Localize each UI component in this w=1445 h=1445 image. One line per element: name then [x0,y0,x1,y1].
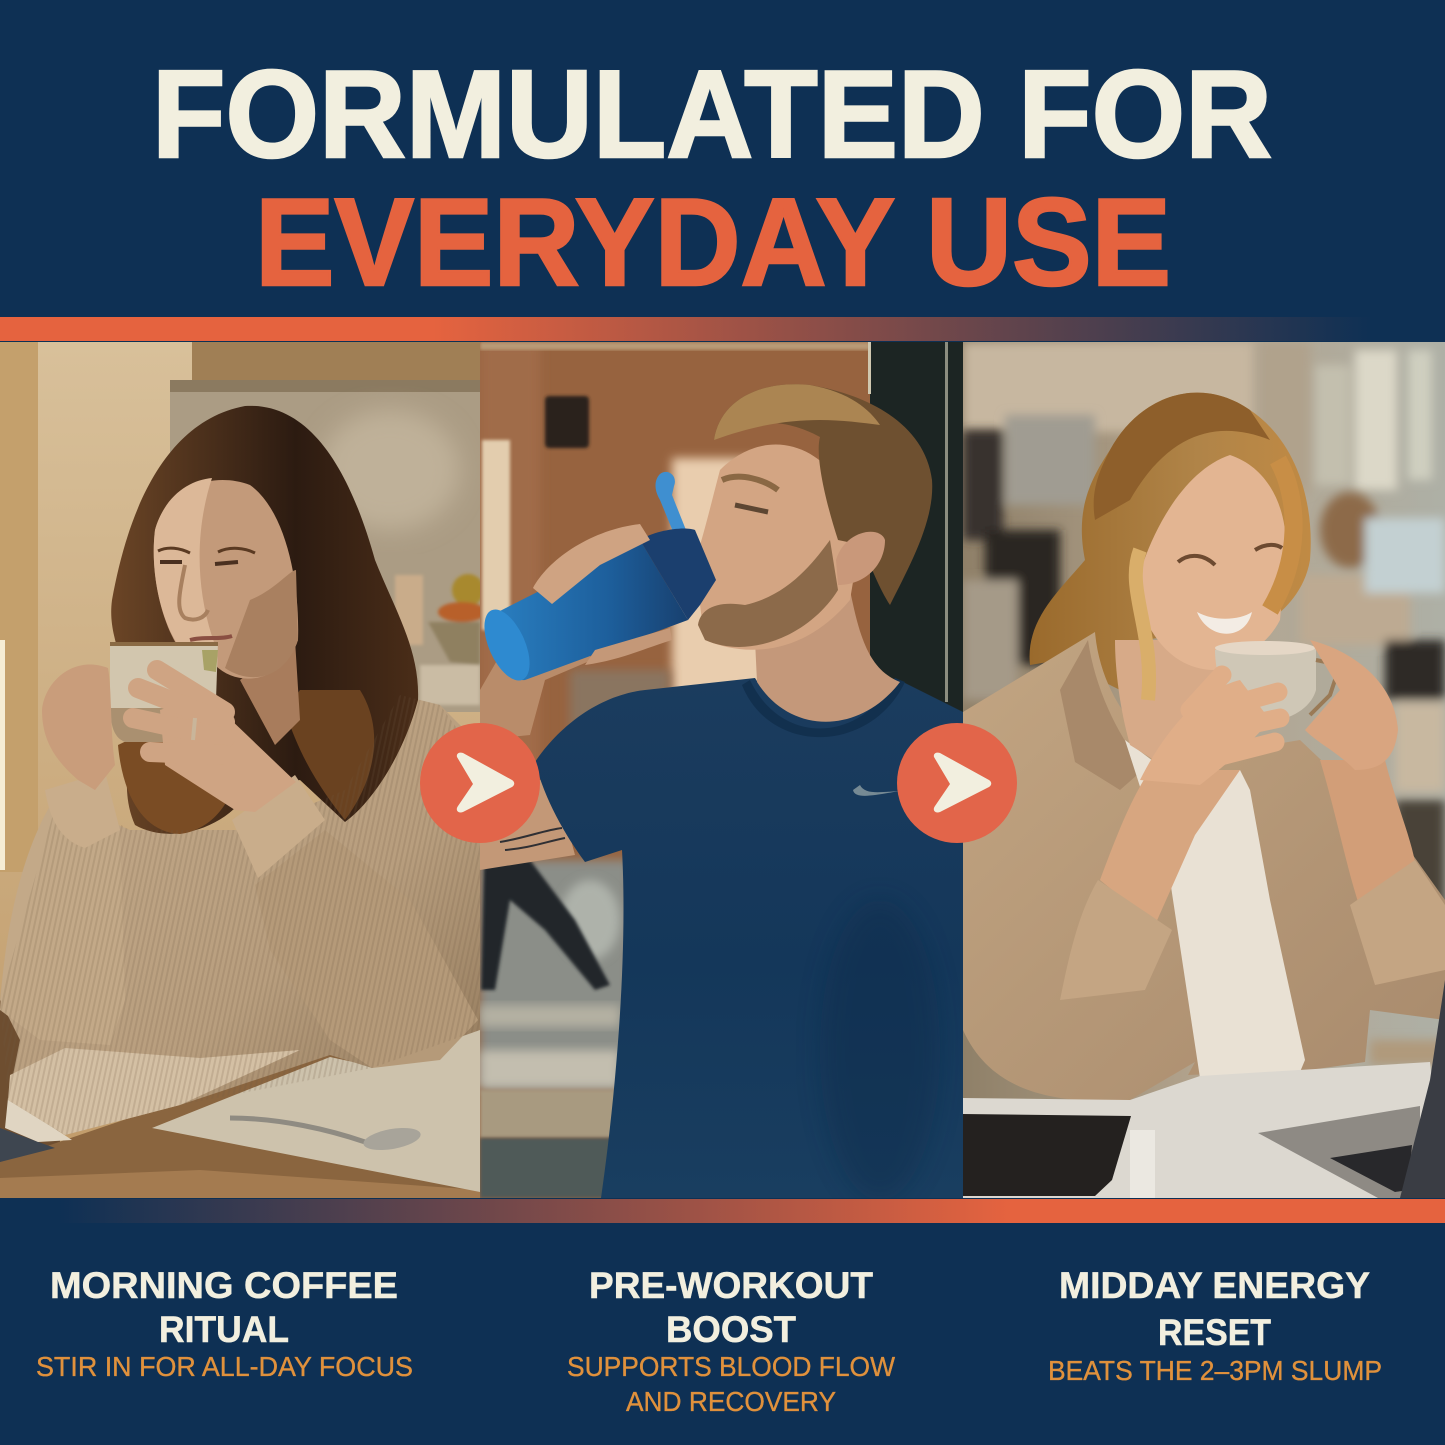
cuffs [45,772,120,848]
runner legs [481,860,610,990]
caption: pre-workout boost [567,1265,896,1417]
title: FORMULATED FOR [152,46,1272,184]
lower arm with tattoo [480,780,575,870]
caption: midday energy reset: RESET [1158,1312,1271,1353]
caption: morning coffee ritual [36,1265,413,1382]
office background shapes [963,415,1445,1065]
title: EVERYDAY USE [255,174,1171,312]
panel: midday energy photo [963,342,1445,1198]
gym equipment [566,666,676,726]
hands [1140,640,1398,785]
top gradient bar [0,317,1445,341]
bright office windows [1260,342,1432,492]
neck [240,640,300,745]
arrow: first to second [420,723,540,843]
supporting hand [585,628,672,665]
caption: pre-workout boost: PRE-WORKOUT [589,1265,873,1306]
neck [755,590,900,722]
loose strand [1136,550,1149,700]
caption: morning coffee ritual: MORNING COFFEE [50,1265,398,1306]
caption: pre-workout boost: AND RECOVERY [626,1386,836,1417]
white top [1125,740,1305,1078]
right hand [133,670,296,812]
hair [714,384,932,605]
panel: morning coffee photo [0,342,486,1198]
sleeves [1060,880,1172,1000]
floor [480,1090,620,1138]
raised forearm [480,656,590,736]
caption: midday energy reset [1048,1265,1382,1386]
neck [1115,640,1235,770]
caption: pre-workout boost: BOOST [666,1309,796,1350]
dark pillar [870,342,963,712]
jacket [963,632,1445,1101]
t-shirt [535,678,963,1198]
spoon [230,1118,422,1154]
left forearm [1100,770,1240,925]
placemat [152,1030,480,1192]
knit texture [0,695,480,1135]
laptop [1258,980,1445,1198]
kitchen cabinet [192,342,480,382]
caption: morning coffee ritual: RITUAL [159,1309,289,1350]
backsplash [170,392,480,712]
hair [1030,393,1311,690]
caption: midday energy reset: BEATS THE 2–3PM SLUMP [1048,1355,1382,1386]
ear [836,532,885,585]
notebook [963,1114,1131,1196]
face [1135,455,1286,670]
wall speaker [545,396,589,448]
hair [111,406,418,834]
fruit bowl [395,574,486,705]
desk [963,1062,1445,1198]
caption: morning coffee ritual: STIR IN FOR ALL-DAY FOCUS [36,1351,413,1382]
title [152,46,1272,312]
mug [110,642,218,742]
face [697,445,860,650]
left hand [42,664,115,790]
caption: midday energy reset: MIDDAY ENERGY [1059,1265,1370,1306]
window glow [482,440,510,630]
right forearm [1320,760,1415,902]
coffee cup [1215,641,1340,722]
bottom gradient bar [0,1199,1445,1223]
right sleeve [321,929,478,1068]
shaker bottle [475,472,716,687]
panel: pre-workout photo [475,342,963,1200]
jacket lapel [1060,640,1145,790]
table [0,1055,464,1189]
logo swoosh [853,785,900,796]
chair [0,1000,60,1170]
gripping hand [533,524,650,604]
caption: pre-workout boost: SUPPORTS BLOOD FLOW [567,1351,896,1382]
left sleeve [0,790,125,1045]
arrow: second to third [897,723,1017,843]
shirt hem [5,1098,72,1142]
jeans [0,1128,55,1162]
sweater [0,695,480,1135]
face [154,478,298,679]
